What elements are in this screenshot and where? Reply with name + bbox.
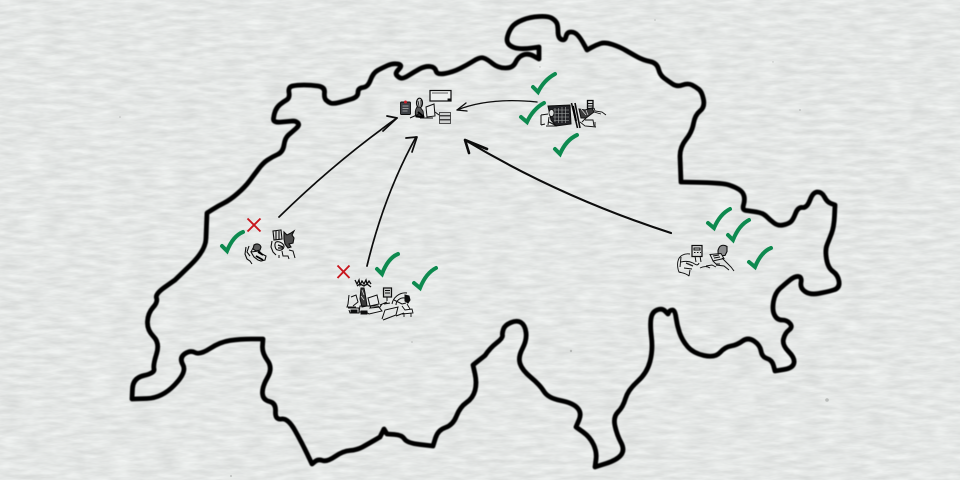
person with speech marks xyxy=(347,280,382,314)
arrow: north-east site to hub xyxy=(457,101,537,111)
check: south-east 1 xyxy=(708,209,730,228)
paper specks xyxy=(119,19,829,477)
wall screen xyxy=(430,90,451,101)
arrow: west site to hub xyxy=(279,116,397,217)
check: west xyxy=(222,232,243,251)
arrow: central site to hub xyxy=(367,137,417,266)
map outline of Switzerland xyxy=(132,16,839,467)
check: north-east 1 xyxy=(533,74,555,92)
arrow: south-east site to hub xyxy=(465,140,671,233)
database stack xyxy=(440,112,450,124)
red cross: west xyxy=(248,218,260,232)
person holding document xyxy=(678,246,702,276)
icon: north-east site team xyxy=(541,100,606,128)
icon: south-east site team xyxy=(678,245,734,276)
check: central 2 xyxy=(414,268,436,288)
laptop xyxy=(368,295,390,308)
clipboard xyxy=(400,100,410,114)
icon: central hub workstation xyxy=(400,90,451,124)
seated person with laptop xyxy=(410,98,439,118)
check: north-east 3 xyxy=(555,135,577,154)
person at board right xyxy=(271,230,295,259)
icon: west site team xyxy=(245,230,295,264)
person reading xyxy=(700,245,734,271)
check: south-east 3 xyxy=(749,248,771,267)
dark wall grid xyxy=(541,105,571,126)
standing person and desk xyxy=(572,100,606,128)
green check marks xyxy=(222,74,771,288)
check: south-east 2 xyxy=(728,220,749,240)
red cross: central xyxy=(338,266,350,278)
check: central 1 xyxy=(377,254,398,274)
check: north-east 2 xyxy=(521,103,544,122)
person at desk left xyxy=(245,244,266,264)
icon: central site team xyxy=(347,280,413,320)
monitor and second person xyxy=(382,288,413,320)
